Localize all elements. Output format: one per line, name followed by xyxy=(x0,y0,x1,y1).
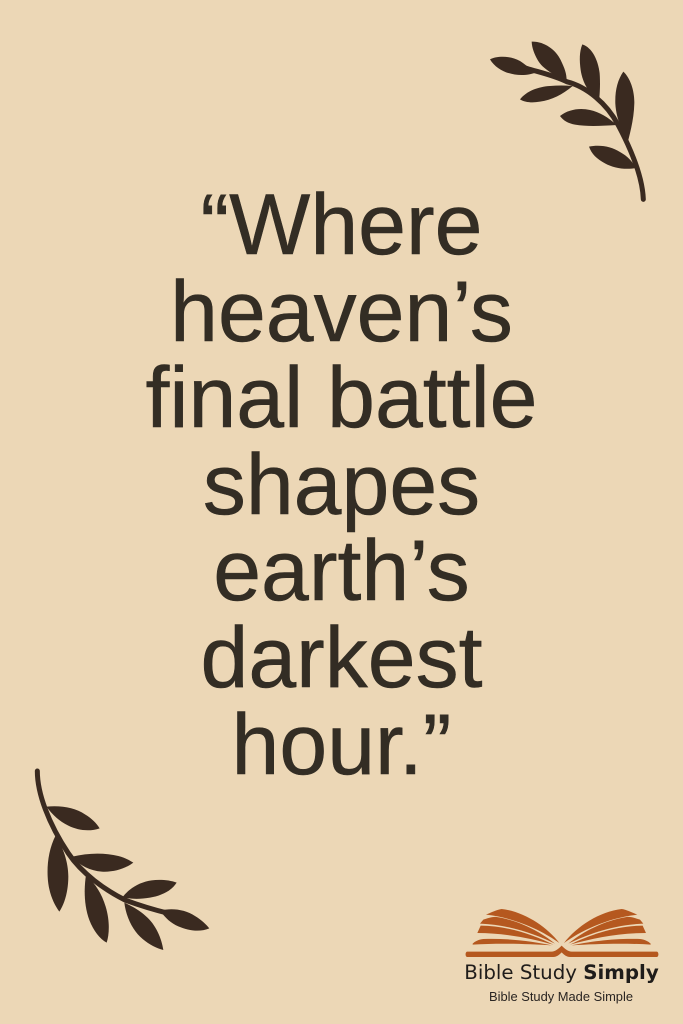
quote text: final battle xyxy=(145,350,538,446)
icon: top right leaf branch xyxy=(490,42,643,199)
quote text: hour.” xyxy=(232,697,451,793)
quote text: shapes xyxy=(203,437,480,533)
quote text: earth’s xyxy=(213,523,470,619)
icon: bottom left leaf branch xyxy=(37,771,209,950)
quote text: heaven’s xyxy=(170,264,513,360)
logo name: Bible Study Simply xyxy=(464,961,659,984)
quote text: “Where xyxy=(201,177,482,273)
quote text: darkest xyxy=(200,610,483,706)
logo tagline: Bible Study Made Simple xyxy=(489,989,633,1004)
icon: open book logo xyxy=(466,909,658,957)
